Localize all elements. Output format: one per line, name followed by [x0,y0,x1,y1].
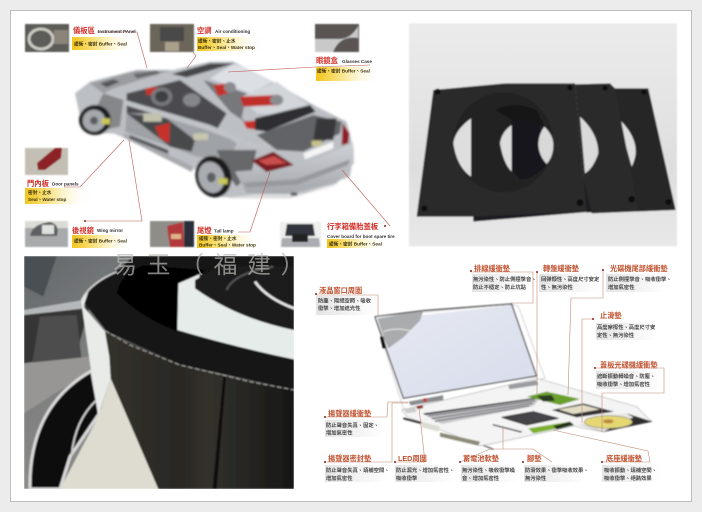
callout: dial cushion [536,264,600,292]
callout: speaker cushion: 增加氣密性 [326,428,353,436]
callout: tail lamp: Tail lamp [214,228,234,234]
callout: cover optical drive cushion: 遮斷振動轉噪音、防塵、 [597,372,655,380]
callout: optical drive rear cushion [602,264,672,292]
callout: battery pad [459,454,519,482]
callout: foot pad: 無污染性 [525,474,547,482]
callout: dial cushion: 性、無污染性 [541,283,573,291]
callout: base cushion: 吸收振動、填補空間、 [604,466,657,474]
callout: battery pad: 蓄電池軟墊 [463,454,500,463]
callout: cover optical drive cushion: 吸收衝擊、增加氣密性 [597,380,651,388]
callout: wing mirror: Wing mirror [97,228,123,233]
callout: base cushion: 吸收衝擊、絕熱效果 [604,474,652,482]
callout: door panels [25,148,90,204]
callout: cover optical drive cushion: 蓋板光碟機緩衝墊 [600,360,658,370]
callout: tail lamp: Buffer、Seal、Water stop [199,242,256,248]
watermark: 易玉（福建） [113,252,314,279]
panel: laptop application diagram [315,264,672,482]
callout: anti-slip pad: 定性、無污染性 [597,331,635,339]
callout: LCD window surround [315,286,377,315]
callout: foot pad [522,454,589,482]
callout: LED surround [394,454,455,482]
illustration: exploded laptop [375,304,653,449]
callout: optical drive rear cushion: 防止側撞擊音、吸收衝擊、 [608,275,672,283]
callout: door panels: Seal、Water stop [28,197,67,202]
callout: boot spare tire cover: 緩衝、密封 Buffer、Seal [329,240,382,248]
callout: LCD window surround: 液晶窗口周圍 [319,286,362,295]
callout: tail lamp: 尾燈 [197,226,212,235]
callout: optical drive rear cushion: 光碟機尾部緩衝墊 [610,264,668,273]
callout: battery pad: 音、增加氣密性 [462,474,500,482]
callout: door panels: 門內板 [27,179,50,188]
callout: LED surround: LED周圍 [398,454,427,463]
callout: anti-slip pad: 止滑墊 [600,311,622,320]
callout: boot spare tire cover: 行李箱備胎蓋板 [327,222,379,231]
callout: wing mirror: 緩衝、密封 Buffer、Seal [74,238,127,244]
callout: tail lamp [150,221,262,248]
callout: speaker seal: 揚聲器密封墊 [328,454,372,463]
illustration: cutaway car [75,62,354,202]
callout: dial cushion: 回彈慷性、高度尺寸安定 [541,275,600,283]
callout: instrument panel [25,24,137,52]
callout: instrument panel: 儀板區 [73,26,95,35]
connector lines [64,32,390,232]
callout: wing mirror: 後視鏡 [72,226,95,235]
thumbnail: dashboard [25,24,69,52]
callout: air conditioning: Air conditioning [215,29,250,34]
callout: dial cushion: 轉盤緩衝墊 [543,264,580,273]
callout: boot spare tire cover [280,222,395,248]
photo: black foam gaskets [409,23,677,246]
callout: speaker cushion: 揚聲器緩衝墊 [328,409,372,418]
callout: optical drive rear cushion: 增加氣密性 [608,283,635,291]
callout: cable cushion: 防止不穩定、防止坑點 [473,283,527,291]
panel: car application diagram [25,24,395,248]
callout: wing mirror [25,220,134,248]
callout: instrument panel: 緩衝、密封 Buffer、Seal [74,40,127,48]
callout: glasses case: Glasses Case [342,59,372,64]
callout: door panels: 密封、止水 [28,189,52,196]
callout: foot pad: 防滑效果、衝擊吸收效果、 [525,466,589,474]
callout: LCD window surround: 衝擊、增加遮光性 [318,304,361,312]
callout: air conditioning: 緩衝、密封、止水 [198,38,236,44]
callout: anti-slip pad: 高度摩擦性、高度尺寸安 [597,323,655,331]
callout: air conditioning [150,24,262,52]
thumbnail: open boot [280,222,321,247]
callout: tail lamp: 緩衝、密封、止水 [199,235,237,242]
leader lines [316,270,664,462]
callout: instrument panel: Instrument PAnel [98,29,136,34]
callout: air conditioning: Buffer、Seal、Water stop [198,45,255,50]
callout: LCD window surround: 防塵、隔絕空間、吸收 [318,296,372,304]
callout: cover optical drive cushion [594,360,662,389]
callout: speaker seal: 防止聲音失真、填補空間、 [326,466,390,474]
callout: cable cushion: 排線緩衝墊 [474,264,511,273]
callout: LED surround: 吸收衝擊 [396,474,418,482]
thumbnail: glasses case [315,24,359,52]
thumbnail: door panel [25,148,68,175]
callout: speaker cushion [324,409,385,437]
callout: cable cushion [470,264,537,292]
callout: boot spare tire cover: Cover board for boot spare tire [327,234,395,239]
callout: door panels: Door panels [52,182,79,186]
thumbnail: center console [150,24,194,52]
thumbnail: tail lamp [150,221,194,247]
callout: glasses case: 眼鏡盒 [316,56,339,65]
callout: glasses case [315,24,382,81]
callout: cable cushion: 無污染性、防止側撞擊音、 [473,275,537,283]
callout: foot pad: 腳墊 [527,454,542,463]
thumbnail: wing mirror [25,221,68,247]
callout: LED surround: 防止漏光、增加氣密性、 [396,466,454,474]
callout: air conditioning: 空調 [197,26,212,35]
callout: battery pad: 無污染性、吸收衝擊噪 [462,466,516,474]
callout: base cushion [601,454,662,482]
callout: speaker cushion: 防止聲音失真、固定、 [326,421,379,429]
callout: glasses case: 緩衝、密封 Buffer、Seal [317,68,370,74]
callout: base cushion: 底座緩衝墊 [606,454,643,463]
callout: speaker seal: 增加氣密性 [326,474,353,482]
callout: anti-slip pad [592,311,658,340]
photo: foam tape roll [24,252,314,489]
callout: speaker seal [324,454,390,482]
